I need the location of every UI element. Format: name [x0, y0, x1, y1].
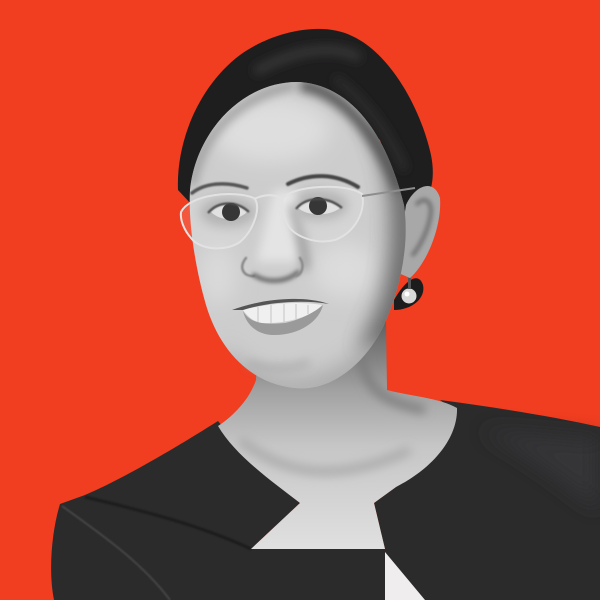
right eye: [298, 200, 340, 214]
eye socket shading: [200, 197, 256, 227]
ear: [394, 186, 440, 310]
left eye: [211, 205, 247, 219]
smile: [232, 299, 329, 368]
hair: [178, 29, 433, 225]
nose: [242, 258, 303, 281]
glasses: [181, 187, 415, 248]
earring: [402, 278, 416, 304]
hair behind earring: [394, 278, 423, 310]
eyes: [192, 176, 358, 221]
eyebrows: [192, 184, 247, 193]
neck and chest: [218, 320, 457, 600]
face: [190, 82, 420, 400]
jacket: [51, 400, 600, 600]
blouse: [385, 552, 425, 600]
nose shadow: [292, 205, 305, 270]
